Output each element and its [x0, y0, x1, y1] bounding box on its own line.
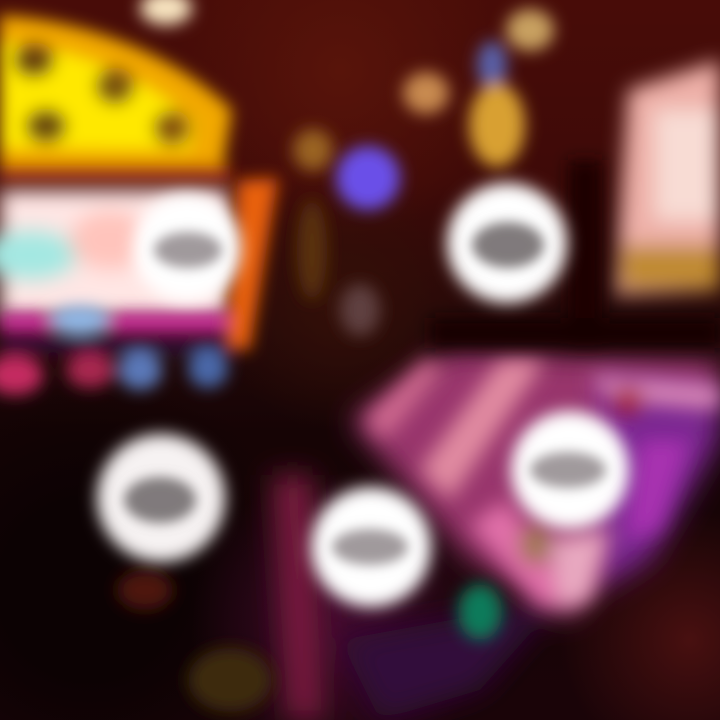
dark vertical and horizontal beam: [430, 160, 720, 350]
right bright sign: [615, 60, 720, 295]
callout circle 4: [311, 487, 431, 607]
small lights: [117, 0, 554, 712]
slot machine floor lights: [272, 350, 720, 720]
callout circle 5: [97, 434, 225, 562]
left bright screen: [0, 178, 278, 395]
callout circle 1: [133, 194, 241, 302]
callout circle 3: [511, 411, 629, 529]
blue light: [336, 146, 400, 210]
callout circle 2: [447, 183, 567, 303]
left sign: yellow dome: [0, 15, 232, 181]
slot machine stripes: [365, 360, 720, 610]
